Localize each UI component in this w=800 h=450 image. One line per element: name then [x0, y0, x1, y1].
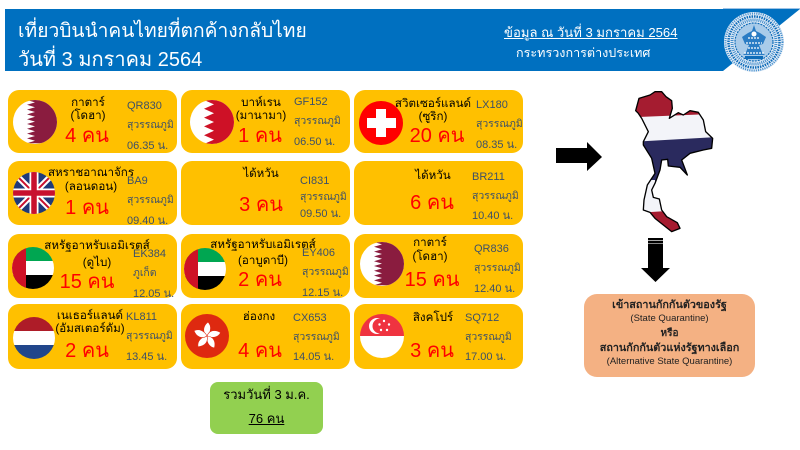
title line 1: เที่ยวบินนำคนไทยที่ตกค้างกลับไทย	[18, 21, 307, 42]
card: United Kingdom London BA9	[8, 161, 177, 225]
flight number: EY406	[302, 247, 335, 259]
icon: ministry seal	[724, 12, 784, 72]
airport: สุวรรณภูมิ	[302, 267, 349, 278]
time: 09.40 น.	[127, 215, 168, 227]
time: 12.05 น.	[133, 288, 174, 300]
destination: ฮ่องกง	[243, 310, 275, 323]
destination: สวิตเซอร์แลนด์	[395, 97, 471, 110]
time: 17.00 น.	[465, 351, 506, 363]
destination: สหรัฐอาหรับเอมิเรตส์	[44, 239, 150, 252]
flight number: QR830	[127, 100, 162, 112]
icon: Bahrain flag	[190, 100, 234, 144]
data date: ข้อมูล ณ วันที่ 3 มกราคม 2564	[504, 25, 678, 40]
flight number: GF152	[294, 96, 328, 108]
icon: Singapore flag	[360, 314, 404, 358]
or: หรือ	[661, 328, 678, 339]
flight number: CX653	[293, 312, 327, 324]
flight number: BR211	[472, 171, 505, 183]
airport: สุวรรณภูมิ	[127, 120, 174, 131]
airport: สุวรรณภูมิ	[474, 263, 521, 274]
card: UAE Dubai EK384	[8, 234, 177, 298]
flight number: QR836	[474, 243, 509, 255]
total box	[210, 382, 323, 434]
flight number: KL811	[126, 311, 157, 323]
destination: ได้หวัน	[243, 167, 279, 180]
time: 14.05 น.	[293, 351, 334, 363]
source ministry: กระทรวงการต่างประเทศ	[516, 46, 650, 60]
city: (อัมสเตอร์ดัม)	[55, 322, 125, 335]
airport: สุวรรณภูมิ	[127, 195, 174, 206]
passenger count: 6 คน	[410, 192, 454, 214]
destination: บาห์เรน	[241, 96, 281, 109]
passenger count: 1 คน	[238, 125, 282, 147]
airport: สุวรรณภูมิ	[476, 119, 523, 130]
airport: สุวรรณภูมิ	[126, 331, 173, 342]
airport: ภูเก็ต	[133, 268, 156, 279]
flight number: EK384	[133, 248, 166, 260]
destination: กาตาร์	[71, 96, 105, 109]
destination: เนเธอร์แลนด์	[57, 309, 123, 322]
passenger count: 4 คน	[65, 125, 109, 147]
card: Hong Kong CX653	[181, 304, 350, 369]
passenger count: 1 คน	[65, 197, 109, 219]
card: Netherlands Amsterdam KL811	[8, 304, 177, 369]
passenger count: 15 คน	[405, 269, 459, 291]
quarantine box	[584, 294, 755, 377]
passenger count: 4 คน	[238, 340, 282, 362]
airport: สุวรรณภูมิ	[472, 191, 519, 202]
icon: Switzerland flag	[359, 101, 403, 145]
time: 12.40 น.	[474, 283, 515, 295]
passenger count: 2 คน	[65, 340, 109, 362]
state quarantine heading: เข้าสถานกักกันตัวของรัฐ	[612, 299, 727, 311]
time: 12.15 น.	[302, 287, 343, 299]
card: Switzerland Zurich LX180	[354, 90, 523, 153]
airport: สุวรรณภูมิ	[293, 332, 340, 343]
icon: UAE flag	[12, 247, 54, 289]
city: (อาบูดาบี)	[238, 254, 288, 267]
time: 06.50 น.	[294, 136, 335, 148]
flight number: BA9	[127, 175, 148, 187]
destination: สหรัฐอาหรับเอมิเรตส์	[210, 238, 316, 251]
time: 06.35 น.	[127, 140, 168, 152]
city: (ลอนดอน)	[65, 180, 117, 193]
time: 13.45 น.	[126, 351, 167, 363]
destination: กาตาร์	[413, 236, 447, 249]
destination: สหราชอาณาจักร	[48, 166, 134, 179]
city: (มานามา)	[236, 109, 286, 122]
icon: Netherlands flag	[13, 317, 55, 359]
city: (ดูไบ)	[83, 256, 111, 269]
passenger count: 3 คน	[410, 340, 454, 362]
card: Singapore SQ712	[354, 304, 523, 369]
flight number: SQ712	[465, 312, 499, 324]
flight number: LX180	[476, 99, 508, 111]
city: (ซูริก)	[419, 110, 447, 123]
card: Taiwan CI831	[181, 161, 350, 225]
arrow: right to Thailand	[556, 142, 602, 171]
passenger count: 20 คน	[410, 125, 464, 147]
header banner	[5, 8, 800, 72]
card: Qatar Doha QR830	[8, 90, 177, 153]
card: Taiwan BR211	[354, 161, 523, 225]
airport: สุวรรณภูมิ	[294, 116, 341, 127]
icon: Qatar flag	[13, 100, 57, 144]
alternative quarantine heading: สถานกักกันตัวแห่งรัฐทางเลือก	[600, 342, 739, 354]
passenger count: 15 คน	[60, 271, 114, 293]
city: (โดฮา)	[412, 250, 448, 263]
destination: สิงคโปร์	[413, 311, 453, 324]
title line 2: วันที่ 3 มกราคม 2564	[18, 49, 202, 71]
icon: Qatar flag	[360, 242, 404, 286]
icon: UK flag	[13, 172, 55, 214]
state quarantine English: (State Quarantine)	[630, 313, 709, 324]
total label: รวมวันที่ 3 ม.ค.	[223, 387, 310, 402]
card: Qatar Doha QR836	[354, 234, 523, 298]
banner background	[5, 8, 800, 71]
airport: สุวรรณภูมิ	[300, 192, 347, 203]
destination: ได้หวัน	[415, 169, 451, 182]
card: UAE Abu Dhabi EY406	[181, 234, 350, 298]
arrow: down to quarantine	[641, 238, 670, 282]
icon: Hong Kong flag	[185, 314, 229, 358]
airport: สุวรรณภูมิ	[465, 332, 512, 343]
flight number: CI831	[300, 175, 329, 187]
passenger count: 3 คน	[239, 194, 283, 216]
time: 08.35 น.	[476, 139, 517, 151]
card: Bahrain Manama GF152	[181, 90, 350, 153]
time: 09.50 น.	[300, 208, 341, 220]
alternative quarantine English: (Alternative State Quarantine)	[607, 356, 732, 367]
city: (โดฮา)	[70, 109, 106, 122]
icon: UAE flag	[184, 248, 226, 290]
total value: 76 คน	[249, 411, 284, 426]
passenger count: 2 คน	[238, 269, 282, 291]
icon: Thailand map in flag colours	[635, 91, 714, 232]
time: 10.40 น.	[472, 210, 513, 222]
